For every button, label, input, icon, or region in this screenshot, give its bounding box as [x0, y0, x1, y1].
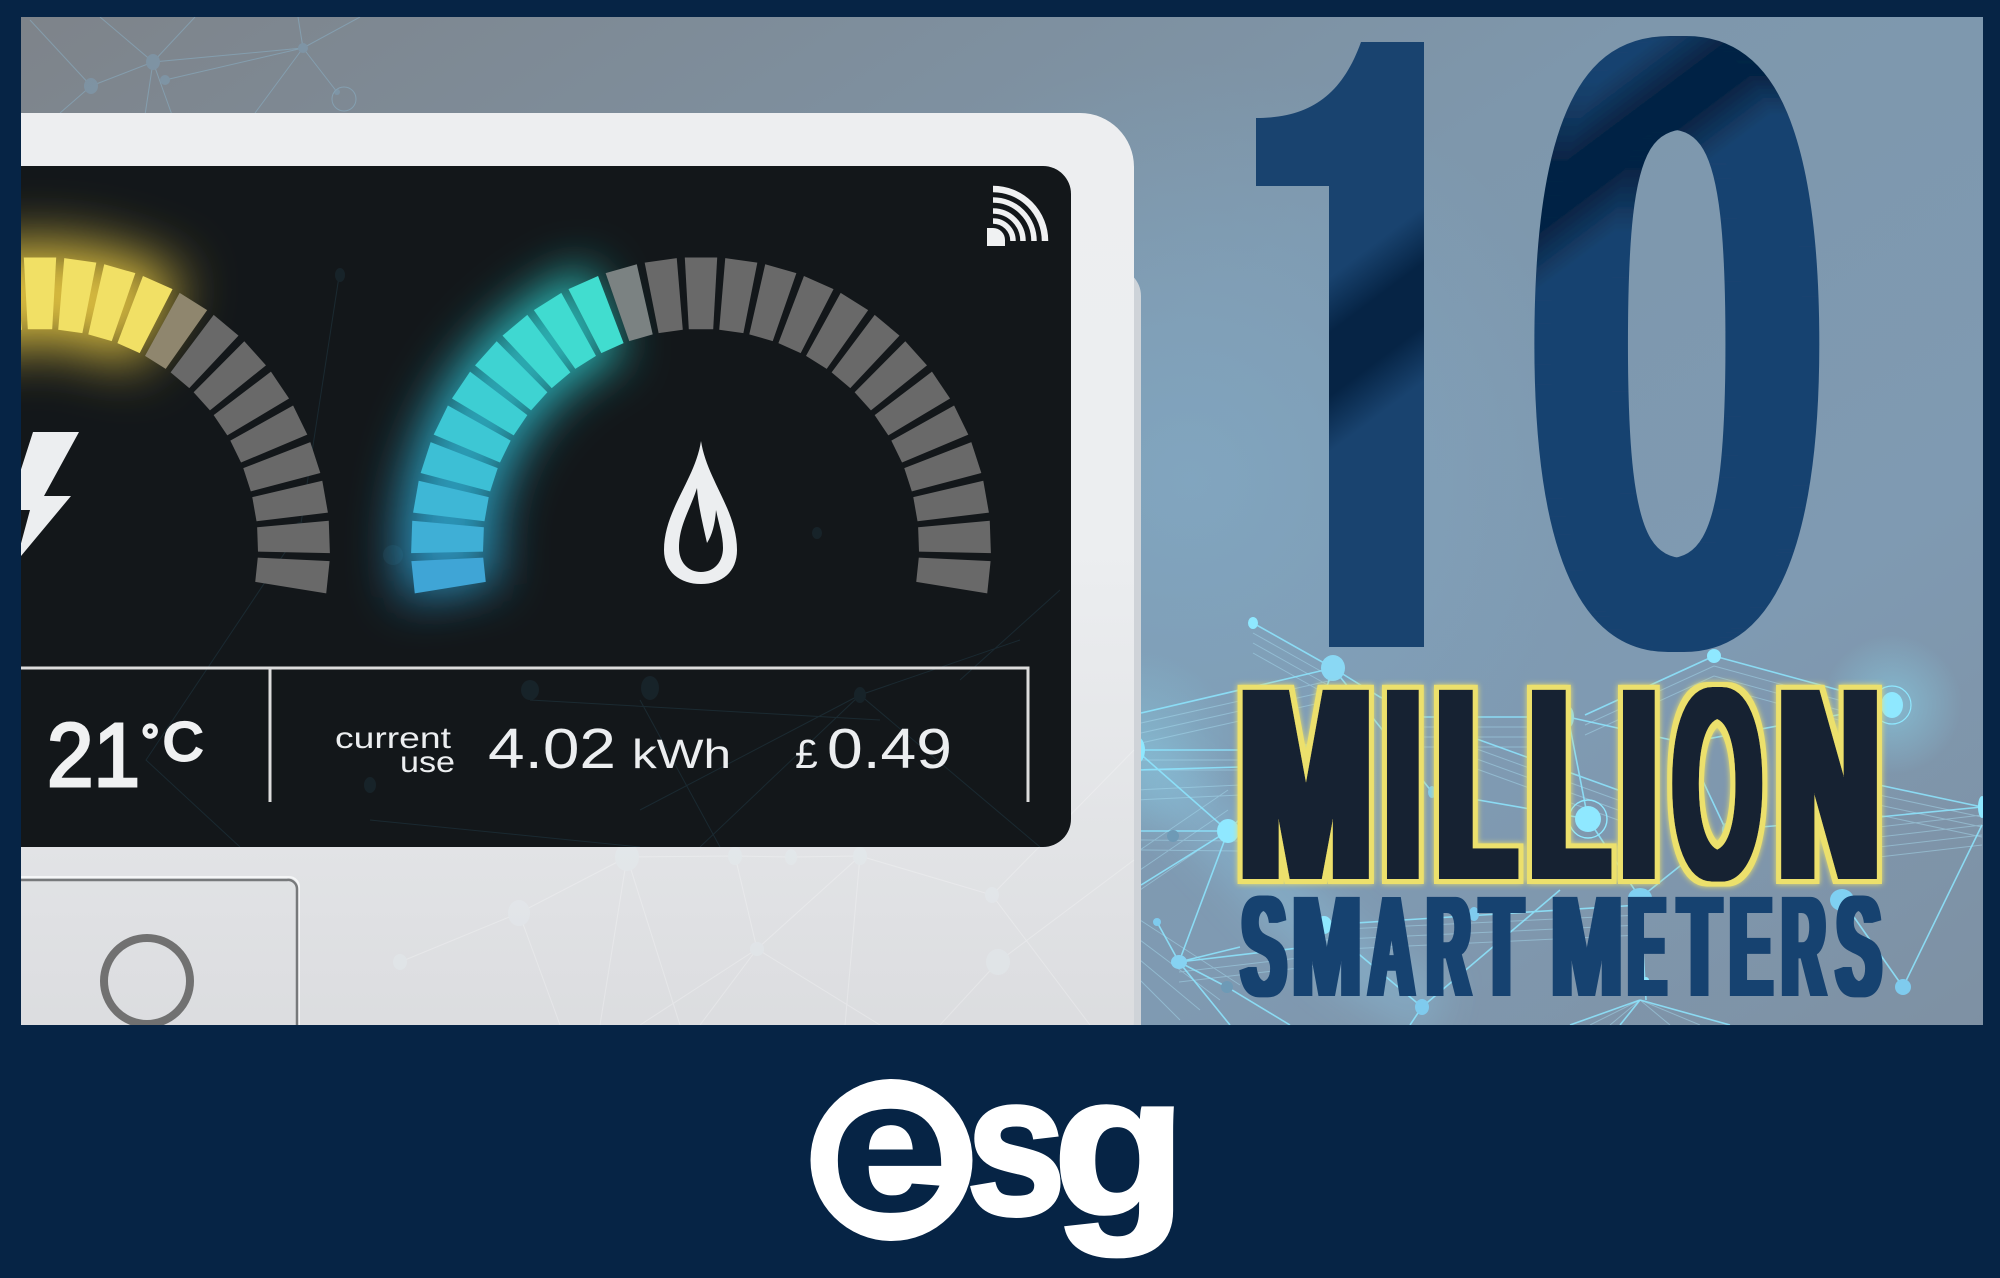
network graphic: right side nodes and links — [1036, 617, 1986, 1025]
esg logo — [810, 1034, 1186, 1257]
device button — [0, 877, 299, 1030]
headline: MILLION: M — [1240, 630, 1371, 938]
energy use value: kWh — [632, 731, 731, 777]
energy use value: 4.02 — [488, 717, 616, 781]
headline: SMART METERS: M — [1292, 866, 1361, 1027]
network graphic: top left — [30, 17, 360, 115]
temperature readout: 21 — [47, 706, 140, 806]
cost value: 0.49 — [827, 717, 952, 781]
icon: gas flame — [664, 441, 737, 584]
headline: SMART METERS: E — [1628, 867, 1666, 1028]
faint network overlay on screen — [146, 268, 1060, 847]
esg logo: s — [966, 1034, 1066, 1257]
headline: MILLION: N — [1780, 630, 1878, 937]
headline: SMART METERS — [1241, 865, 1881, 1028]
headline: SMART METERS: M — [1551, 867, 1622, 1028]
icon: wireless signal — [987, 189, 1045, 246]
current use label: current — [335, 722, 452, 755]
electricity gauge — [0, 258, 330, 593]
headline: SMART METERS: T — [1679, 866, 1720, 1027]
gas gauge glow — [447, 311, 606, 591]
headline: MILLION: L — [1439, 631, 1514, 938]
headline: SMART METERS: R — [1427, 867, 1470, 1027]
temperature readout: C — [163, 712, 203, 772]
esg logo: g — [1053, 1034, 1186, 1257]
headline: SMART METERS: A — [1369, 866, 1414, 1027]
headline: MILLION: L — [1532, 631, 1607, 938]
energy use value — [488, 717, 731, 781]
headline: MILLION — [1240, 630, 1878, 938]
current use label: use — [400, 746, 455, 779]
temperature readout — [47, 706, 203, 806]
cost value: £ — [795, 731, 818, 777]
headline: MILLION: I — [1624, 631, 1654, 938]
readout box lines — [0, 668, 1028, 802]
faint network overlay on device — [420, 914, 1090, 1025]
temperature readout: ° — [141, 715, 159, 767]
icon: lightning bolt — [8, 432, 79, 562]
esg logo: e — [830, 1039, 949, 1251]
headline number: 1 — [1256, 42, 1424, 647]
smart meter device body — [0, 113, 1141, 1073]
headline: MILLION: O — [1672, 630, 1762, 938]
electricity gauge glow — [0, 293, 159, 323]
gas gauge — [411, 258, 991, 593]
headline: MILLION: I — [1388, 631, 1418, 938]
headline: SMART METERS: E — [1730, 865, 1772, 1027]
current use label — [335, 722, 455, 779]
headline: SMART METERS: S — [1836, 865, 1881, 1027]
headline: SMART METERS: S — [1241, 865, 1286, 1027]
headline: SMART METERS: T — [1481, 866, 1522, 1027]
display screen — [0, 166, 1071, 847]
headline: SMART METERS: R — [1782, 867, 1825, 1027]
